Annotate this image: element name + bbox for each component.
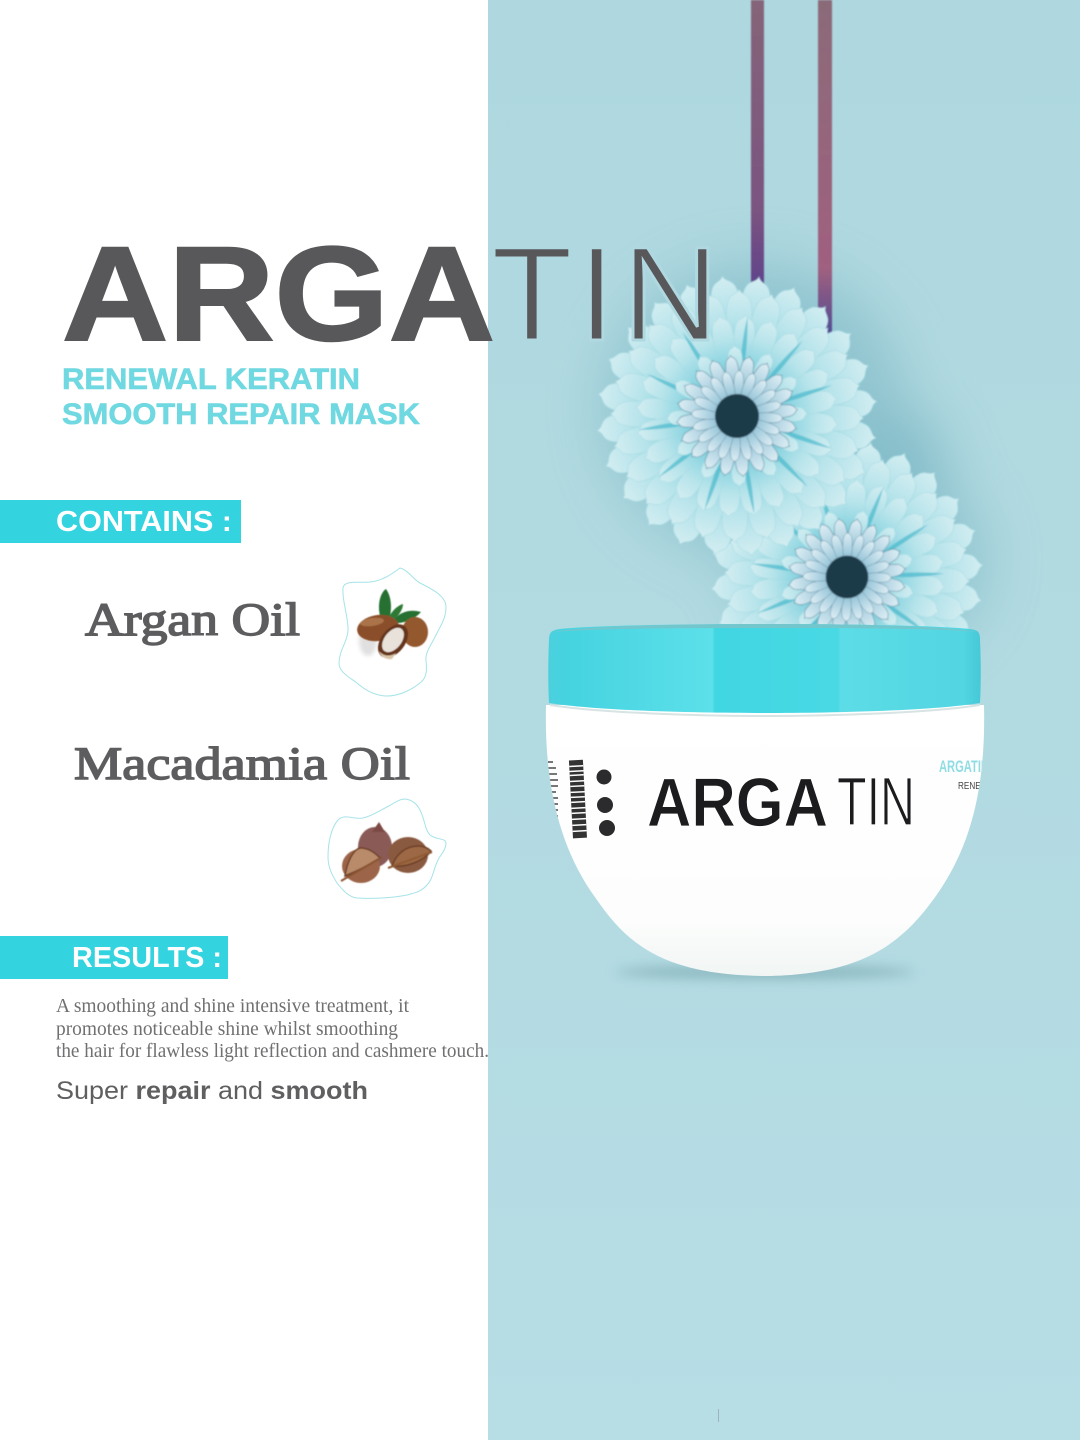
subtitle <box>62 363 420 431</box>
title: I <box>578 220 615 369</box>
ingredient: argan oil label: Argan Oil <box>85 594 300 646</box>
title: T <box>491 220 573 369</box>
side label brand: ARGATIN <box>939 757 989 776</box>
contains banner <box>0 500 241 543</box>
jar <box>546 624 998 979</box>
recycling icons <box>596 770 615 836</box>
results description <box>56 996 489 1062</box>
results description: promotes noticeable shine whilst smoothing <box>56 1019 398 1040</box>
results banner <box>0 936 228 979</box>
flower: lower <box>712 442 982 629</box>
jar brand <box>649 778 911 826</box>
ingredient: macadamia oil label: Macadamia Oil <box>74 738 410 790</box>
ribbon: right <box>818 0 832 335</box>
icon: macadamia nuts in outlined blob <box>328 799 446 898</box>
white left panel <box>0 0 488 1440</box>
contains banner: CONTAINS : <box>56 506 232 538</box>
title <box>62 220 719 369</box>
results banner: RESULTS : <box>72 942 222 974</box>
jar brand: ARGA <box>647 764 828 841</box>
ribbon: left <box>751 0 764 300</box>
ingredient text lines <box>548 762 558 824</box>
results description: A smoothing and shine intensive treatment, it <box>56 996 410 1017</box>
subtitle: SMOOTH REPAIR MASK <box>62 398 420 431</box>
jar lid <box>548 624 981 713</box>
barcode <box>569 760 587 838</box>
jar label <box>548 757 998 841</box>
flower: upper <box>598 276 877 555</box>
subtitle: RENEWAL KERATIN <box>62 363 360 396</box>
jar label: RENEWAL <box>958 781 998 792</box>
blue right panel <box>488 0 1080 1440</box>
title: N <box>622 220 719 369</box>
icon: argan nuts in outlined blob <box>339 568 446 696</box>
jar brand: TIN <box>837 763 915 840</box>
flower shadow <box>605 265 985 665</box>
seam <box>550 705 980 716</box>
jar body <box>546 705 984 976</box>
results description: the hair for flawless light reflection and cashmere touch. <box>56 1041 489 1062</box>
tagline: Super repair and smooth <box>56 1077 368 1105</box>
flowers <box>598 276 982 629</box>
jar shadow <box>615 965 915 979</box>
small tick mark <box>718 1409 719 1422</box>
lid rim <box>553 624 977 632</box>
title: ARGA <box>62 220 495 369</box>
